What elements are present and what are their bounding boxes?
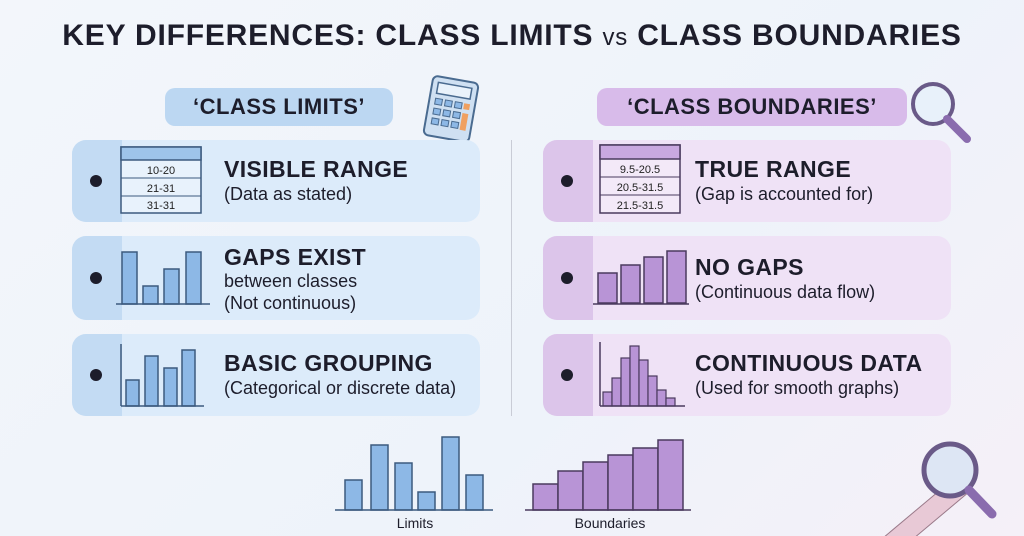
heading: class limits <box>165 88 393 126</box>
card: gaps exist: (Not continuous) <box>224 293 356 313</box>
card: gaps exist: GAPS EXIST <box>224 244 366 270</box>
card: gaps exist: between classes <box>224 271 357 291</box>
histogram icon <box>599 342 685 407</box>
bar icon gaps <box>116 251 210 305</box>
bar icon grouping <box>120 344 204 407</box>
icon: magnifier <box>911 82 971 143</box>
title: KEY DIFFERENCES: CLASS LIMITS vs CLASS BOUNDARIES <box>62 19 962 52</box>
table icon limits: 10-20 <box>147 165 175 177</box>
card: visible range <box>72 140 480 222</box>
table icon limits: 21-31 <box>147 183 175 195</box>
icon: magnifier and ruler <box>884 442 996 536</box>
table icon boundaries: 21.5-31.5 <box>617 200 663 212</box>
label: limits: Limits <box>397 515 433 531</box>
heading: class limits: ‘CLASS LIMITS’ <box>193 94 365 119</box>
card: continuous data: (Used for smooth graphs) <box>695 378 899 398</box>
card: gaps exist <box>72 236 480 320</box>
card: true range <box>543 140 951 222</box>
label: boundaries: Boundaries <box>575 515 645 531</box>
table icon boundaries <box>599 144 681 214</box>
divider <box>511 140 512 416</box>
chart: limits <box>335 436 493 511</box>
card: true range: (Gap is accounted for) <box>695 184 873 204</box>
card: continuous data: CONTINUOUS DATA <box>695 350 922 376</box>
heading: class boundaries <box>597 88 907 126</box>
table icon boundaries: 9.5-20.5 <box>620 164 660 176</box>
table icon limits <box>120 146 202 214</box>
icon: calculator <box>422 75 480 140</box>
card: no gaps: NO GAPS <box>695 254 804 280</box>
card: no gaps <box>543 236 951 320</box>
card: basic grouping: (Categorical or discrete data) <box>224 378 456 398</box>
card: continuous data <box>543 334 951 416</box>
card: visible range: (Data as stated) <box>224 184 352 204</box>
card: visible range: VISIBLE RANGE <box>224 156 408 182</box>
chart: boundaries <box>525 439 691 511</box>
card: basic grouping: BASIC GROUPING <box>224 350 433 376</box>
card: true range: TRUE RANGE <box>695 156 851 182</box>
table icon boundaries: 20.5-31.5 <box>617 182 663 194</box>
card: no gaps: (Continuous data flow) <box>695 282 875 302</box>
heading: class boundaries: ‘CLASS BOUNDARIES’ <box>627 94 877 119</box>
table icon limits: 31-31 <box>147 200 175 212</box>
card: basic grouping <box>72 334 480 416</box>
bar icon no gaps <box>593 250 689 305</box>
